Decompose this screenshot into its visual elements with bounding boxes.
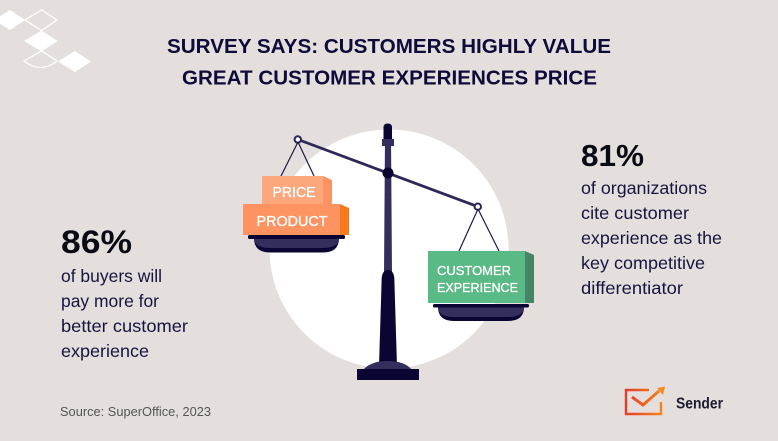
box: price	[262, 176, 332, 204]
stat: 81% of organizations: 81%	[581, 138, 644, 173]
box: product	[243, 204, 349, 235]
title: SURVEY SAYS: CUSTOMERS HIGHLY VALUE	[167, 35, 611, 58]
icon: envelope with arrow	[626, 386, 665, 414]
title	[167, 35, 611, 90]
sender logo	[626, 386, 723, 414]
title: GREAT CUSTOMER EXPERIENCES PRICE	[182, 66, 597, 90]
box: customer experience: CUSTOMER	[437, 263, 511, 278]
box: price: PRICE	[272, 184, 316, 201]
stat: 81% of organizations: key competitive	[581, 253, 705, 273]
stat: 81% of organizations: experience as the	[581, 228, 722, 248]
left pan	[248, 142, 345, 252]
right pan	[433, 209, 529, 321]
wordmark: Sender	[676, 396, 723, 412]
box: customer experience: EXPERIENCE	[437, 280, 518, 295]
source: Source: SuperOffice, 2023	[60, 405, 211, 419]
stat: 81% of organizations: of organizations	[581, 178, 707, 198]
stat: 81% of organizations: cite customer	[581, 203, 689, 223]
box: product: PRODUCT	[256, 213, 328, 230]
decorative diamonds	[0, 10, 91, 72]
stat: 86% of buyers	[61, 224, 188, 361]
stat: 81% of organizations: differentiator	[581, 278, 683, 298]
stat: 86% of buyers: better customer	[61, 316, 188, 336]
scale illustration	[243, 124, 534, 380]
stat: 86% of buyers: 86%	[61, 224, 132, 260]
white circle backdrop	[270, 130, 508, 368]
stat: 86% of buyers: pay more for	[61, 291, 159, 311]
box: customer experience	[428, 251, 534, 303]
scale column	[357, 124, 419, 380]
stat: 86% of buyers: of buyers will	[61, 266, 162, 286]
stat: 81% of organizations	[581, 138, 722, 298]
stat: 86% of buyers: experience	[61, 341, 149, 361]
scale beam	[295, 136, 481, 210]
